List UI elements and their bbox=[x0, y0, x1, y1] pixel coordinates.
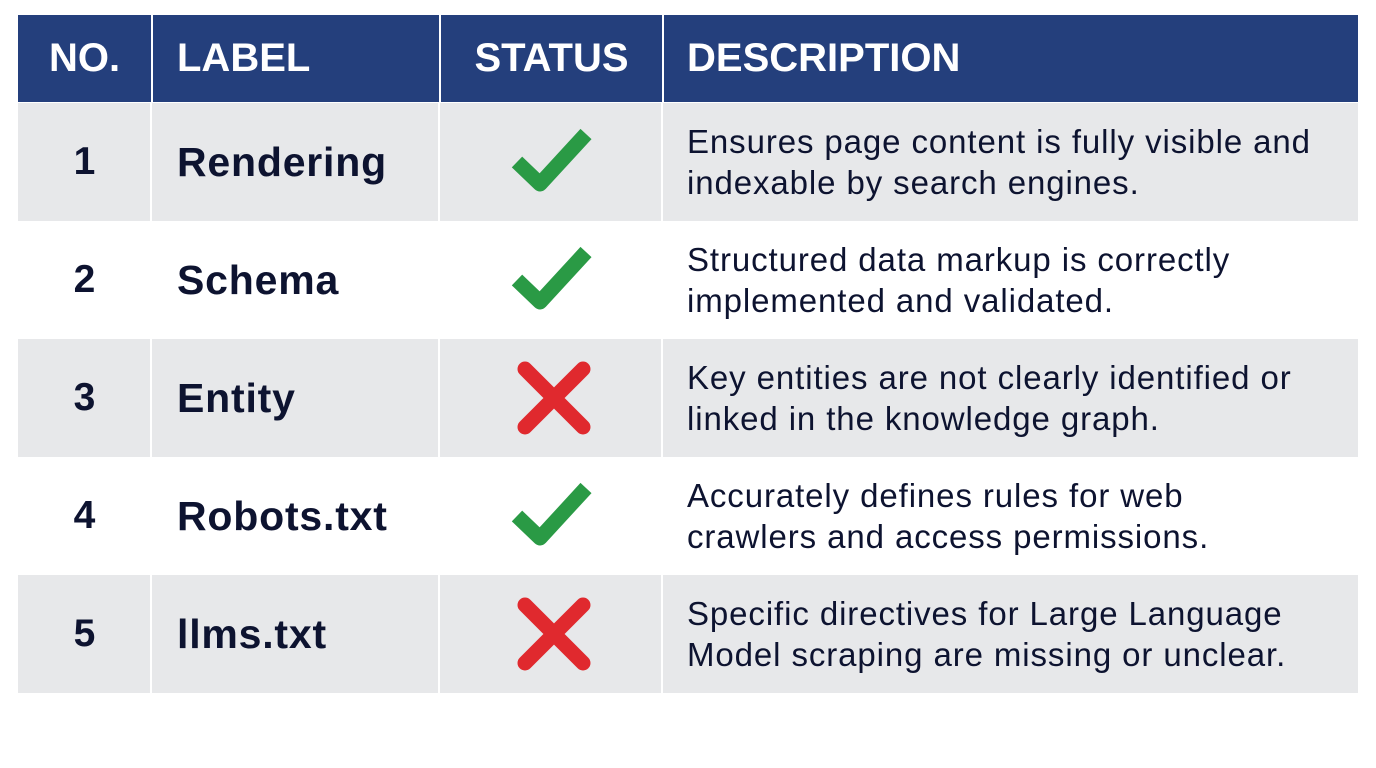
row 1: Rendering: Rendering bbox=[177, 138, 387, 184]
row 5: llms.txt bbox=[18, 575, 1358, 693]
header: STATUS bbox=[441, 15, 662, 102]
row 4: Robots.txt bbox=[74, 477, 1209, 555]
header: LABEL bbox=[153, 15, 439, 102]
row 3: Entity: Entity bbox=[177, 374, 296, 420]
row 3: Entity: 3 bbox=[74, 376, 95, 419]
row 1: Rendering: 1 bbox=[74, 140, 95, 183]
row 3: Entity: linked in the knowledge graph. bbox=[687, 400, 1160, 437]
row 1: Rendering: indexable by search engines. bbox=[687, 164, 1140, 201]
row 5: llms.txt: Specific directives for Large Language bbox=[687, 595, 1283, 632]
header: DESCRIPTION bbox=[664, 15, 1358, 102]
row 2: Schema: 2 bbox=[74, 258, 95, 301]
row 5: llms.txt: Model scraping are missing or unclear. bbox=[687, 636, 1286, 673]
row 1: Rendering: Ensures page content is fully visible and bbox=[687, 123, 1311, 160]
header: LABEL: LABEL bbox=[177, 36, 310, 80]
header: STATUS: STATUS bbox=[474, 36, 629, 80]
row 2: Schema: Structured data markup is correctly bbox=[687, 241, 1230, 278]
icon: cross bbox=[518, 598, 590, 670]
row 4: Robots.txt: Accurately defines rules for web bbox=[687, 477, 1184, 514]
row 2: Schema: implemented and validated. bbox=[687, 282, 1114, 319]
table header bbox=[18, 15, 1358, 102]
header: DESCRIPTION: DESCRIPTION bbox=[687, 36, 960, 80]
row 2: Schema bbox=[74, 241, 1230, 319]
icon: check bbox=[512, 246, 592, 310]
icon: check bbox=[512, 128, 592, 192]
row 1: Rendering bbox=[18, 103, 1358, 221]
row 3: Entity bbox=[18, 339, 1358, 457]
row 4: Robots.txt: Robots.txt bbox=[177, 492, 388, 538]
icon: cross bbox=[518, 362, 590, 434]
row 5: llms.txt: llms.txt bbox=[177, 610, 327, 656]
row 4: Robots.txt: crawlers and access permissions. bbox=[687, 518, 1209, 555]
row 3: Entity: Key entities are not clearly identified or bbox=[687, 359, 1292, 396]
header: NO. bbox=[18, 15, 151, 102]
icon: check bbox=[512, 482, 592, 546]
row 2: Schema: Schema bbox=[177, 256, 339, 302]
row 5: llms.txt: 5 bbox=[74, 612, 95, 655]
header: NO.: NO. bbox=[49, 36, 120, 80]
row 4: Robots.txt: 4 bbox=[74, 494, 95, 537]
